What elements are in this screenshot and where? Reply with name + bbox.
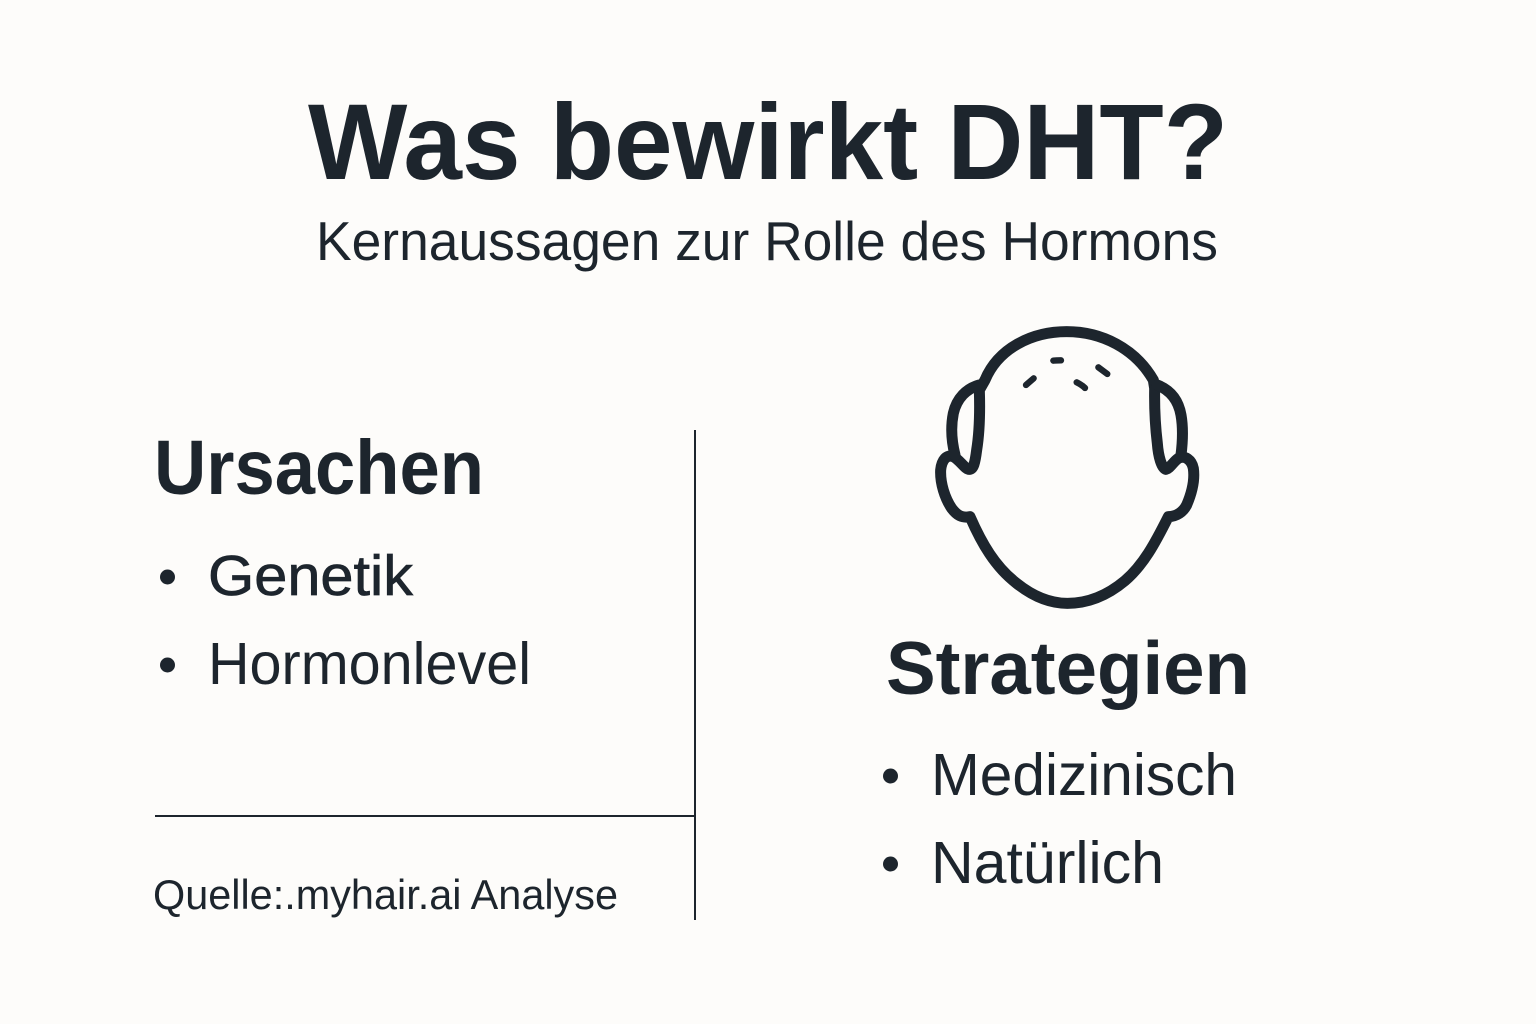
title: Was bewirkt DHT? [308,81,1228,202]
heading: Strategien: Strategien [886,626,1250,710]
list item: Hormonlevel: Hormonlevel [208,631,531,697]
panel: causes [154,425,531,697]
left ear [952,385,979,455]
subtitle: Kernaussagen zur Rolle des Hormons [316,210,1218,272]
list item: Medizinisch: Medizinisch [931,742,1237,808]
list item: Natürlich: Natürlich [931,830,1164,896]
list item: Genetik: Genetik [208,544,414,608]
source note: Quelle:.myhair.ai Analyse [153,871,618,918]
heading: Ursachen: Ursachen [154,425,484,511]
hair marks [1026,360,1107,388]
icon: balding head [941,332,1194,603]
right ear [1157,385,1183,455]
panel: strategies [883,626,1250,896]
head outline [941,332,1194,603]
